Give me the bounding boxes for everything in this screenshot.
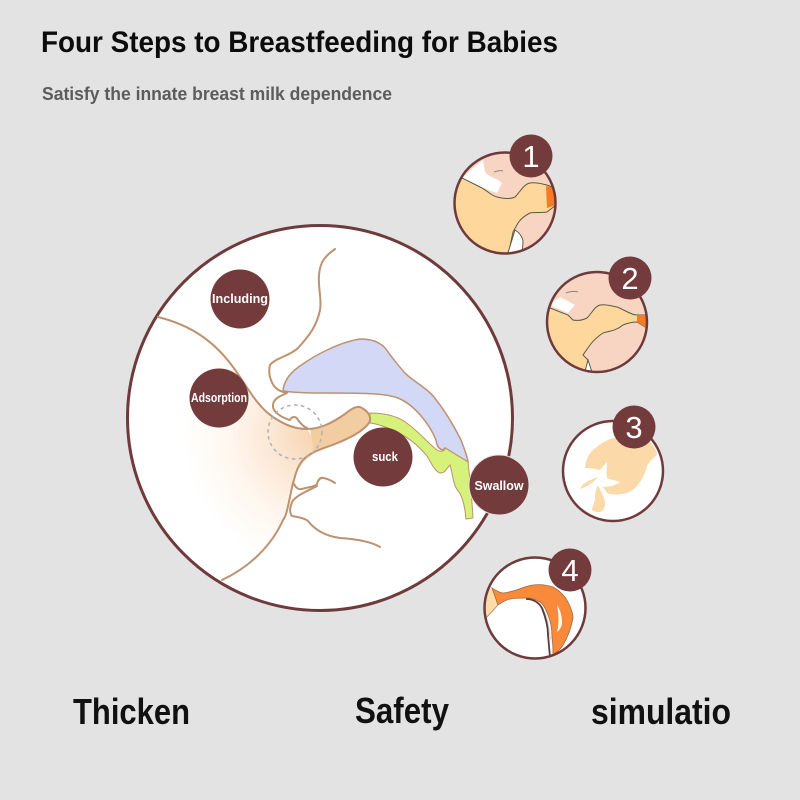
caption: Safety: Safety: [355, 690, 449, 731]
chin: [290, 486, 380, 547]
step 3: 3: [625, 410, 643, 445]
caption: simulatio: simulatio: [591, 691, 731, 732]
label: suck: [354, 428, 412, 486]
step 4: [480, 548, 592, 658]
dashed circle: [268, 405, 322, 459]
label: suck: suck: [372, 449, 399, 464]
breast shading: [158, 317, 320, 580]
label: Swallow: Swallow: [474, 478, 524, 493]
label: Adsorption: Adsorption: [191, 390, 247, 405]
label: Adsorption: [190, 368, 248, 428]
lower lip: [294, 478, 335, 489]
nipple: [310, 407, 370, 452]
label: Swallow: [469, 455, 529, 515]
throat: [370, 413, 473, 519]
breast outline: [158, 317, 370, 580]
panel: main feeding diagram: [128, 226, 529, 610]
step 1: [453, 134, 557, 255]
subtitle: Satisfy the innate breast milk dependence: [42, 84, 392, 104]
label: Including: [210, 270, 270, 328]
palate: [283, 339, 468, 462]
step 4: 4: [561, 553, 579, 588]
nose and upper lip: [269, 249, 335, 428]
step 3: [563, 406, 663, 521]
title: Four Steps to Breastfeeding for Babies: [41, 26, 558, 59]
caption: Thicken: Thicken: [73, 691, 190, 732]
step 2: 2: [621, 261, 639, 296]
label: Including: Including: [212, 291, 268, 306]
step 2: [540, 256, 652, 375]
step 1: 1: [522, 139, 540, 174]
